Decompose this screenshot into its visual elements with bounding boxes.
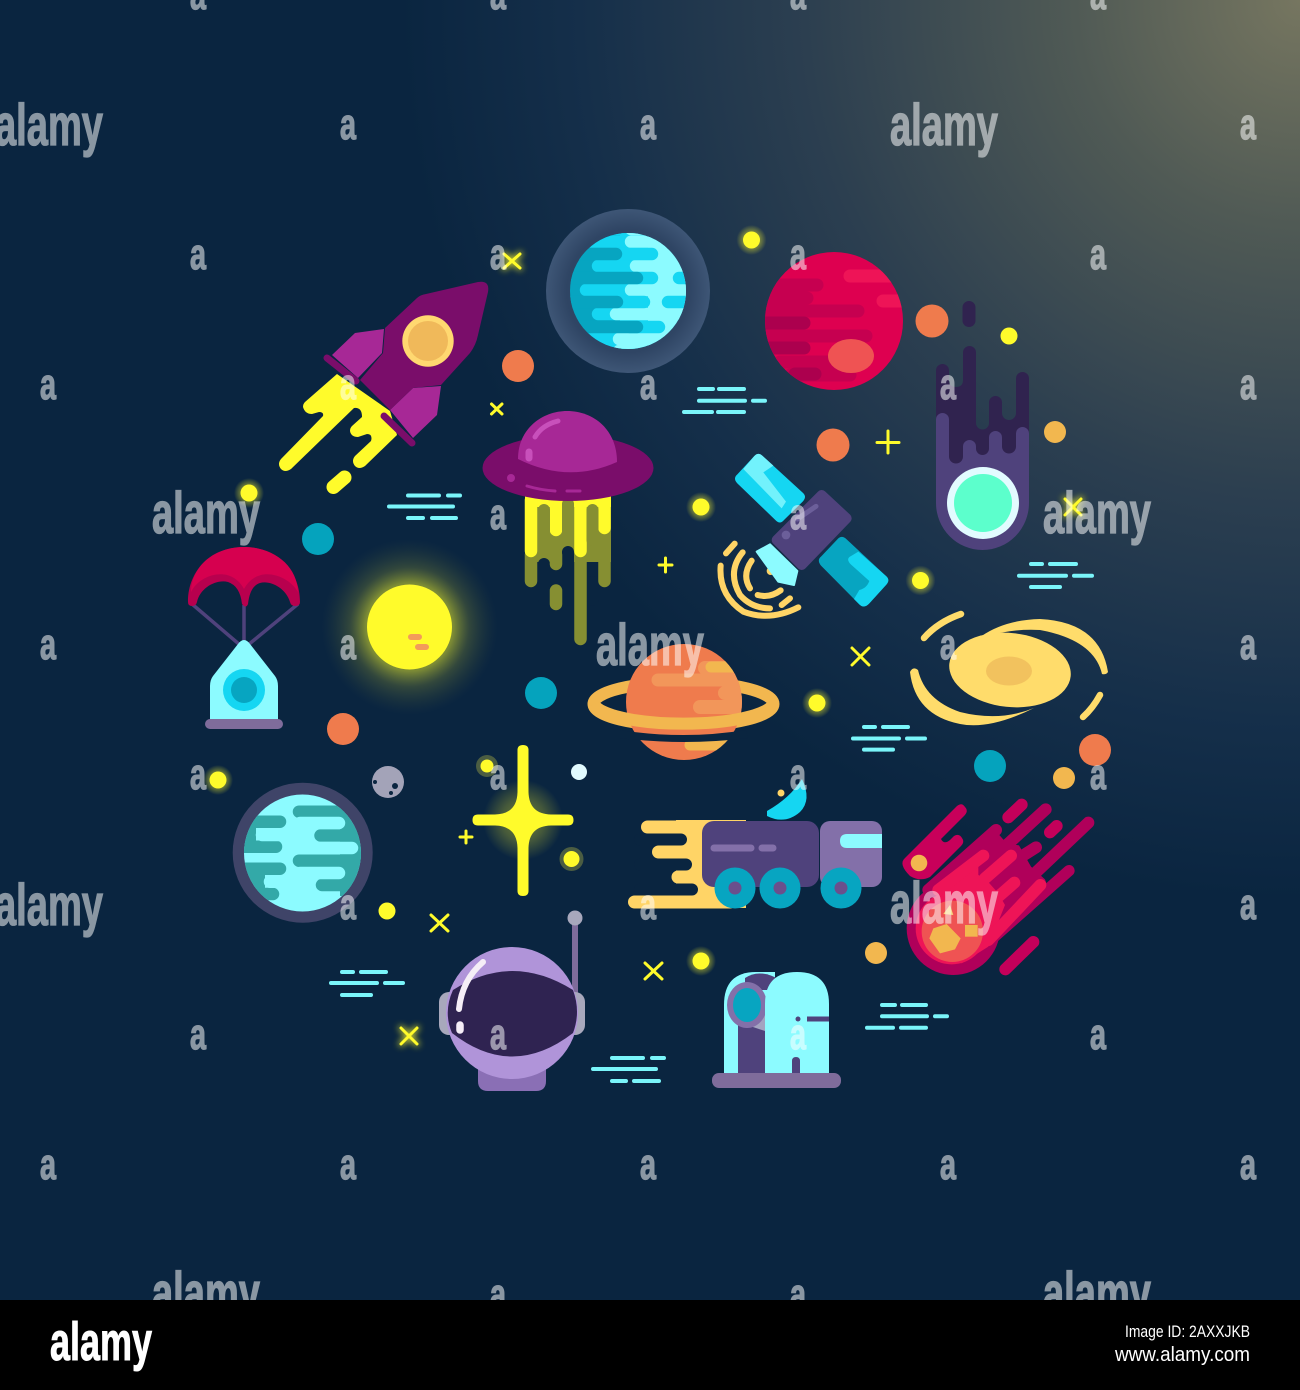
icon: parachute capsule — [188, 547, 300, 729]
watermark pattern: a — [340, 620, 356, 669]
rocket fins — [332, 329, 441, 438]
comet body — [936, 413, 1029, 550]
watermark pattern: a — [40, 1140, 56, 1189]
capsule base — [205, 719, 283, 729]
parachute canopy — [188, 547, 300, 606]
watermark pattern: a — [1090, 1010, 1106, 1059]
helmet visor — [448, 971, 577, 1056]
satellite dish module — [757, 544, 797, 585]
watermark pattern: alamy — [890, 871, 998, 936]
rover body — [702, 821, 819, 887]
watermark pattern: a — [1240, 620, 1256, 669]
icon: blue planet with halo — [546, 209, 710, 373]
watermark pattern: a — [40, 620, 56, 669]
icon: lunar rover — [634, 779, 882, 908]
icon: teal planet — [233, 783, 380, 923]
watermark pattern: alamy — [1043, 1261, 1151, 1326]
decorative dots: orange, teal and gold — [302, 304, 1111, 964]
rocket body — [360, 282, 488, 410]
saturn back ring — [594, 682, 774, 726]
saturn sphere — [626, 644, 742, 760]
watermark pattern: a — [640, 880, 656, 929]
watermark pattern: a — [640, 360, 656, 409]
icon: galaxy — [910, 614, 1108, 725]
observatory right dome — [765, 972, 829, 1073]
watermark pattern: alamy — [890, 93, 998, 158]
watermark pattern: a — [490, 490, 506, 539]
rocket window — [402, 315, 454, 367]
watermark pattern: a — [40, 360, 56, 409]
watermark pattern: a — [790, 490, 806, 539]
small comet — [902, 804, 967, 879]
footer bar — [0, 1300, 1300, 1390]
helmet dome — [446, 947, 578, 1079]
rover dish — [767, 779, 807, 820]
watermark pattern: a — [790, 750, 806, 799]
watermark pattern: a — [940, 360, 956, 409]
comet dark tail — [936, 308, 1029, 475]
helmet ear pieces — [439, 992, 585, 1035]
watermark pattern: alamy — [1043, 481, 1151, 546]
watermark pattern: a — [640, 100, 656, 149]
rocket flame — [279, 374, 397, 487]
meteor rock — [929, 924, 961, 953]
saturn gap and front ring — [620, 730, 748, 742]
satellite lower panel — [819, 537, 888, 606]
icon: rocket — [279, 282, 488, 487]
watermark pattern: a — [940, 620, 956, 669]
watermark pattern: a — [490, 1010, 506, 1059]
watermark pattern: alamy — [596, 613, 704, 678]
helmet antenna — [572, 922, 578, 995]
decorative speed lines — [331, 389, 1092, 1081]
satellite signal waves — [720, 544, 798, 616]
observatory telescope — [727, 982, 767, 1028]
watermark pattern: a — [340, 880, 356, 929]
icon: saturn — [594, 640, 774, 765]
icon: observatory — [712, 972, 841, 1088]
icon: meteor — [902, 804, 1088, 975]
satellite body — [777, 495, 847, 565]
icon: satellite — [720, 454, 888, 616]
decorative crosses and plus signs — [401, 254, 1081, 1044]
watermark pattern: a — [490, 1270, 506, 1319]
icon: sun — [322, 539, 498, 715]
icon: moon — [372, 766, 404, 798]
watermark pattern: a — [790, 1270, 806, 1319]
meteor bright core — [916, 856, 1040, 964]
icon: astronaut helmet — [439, 910, 585, 1091]
watermark pattern: a — [790, 230, 806, 279]
helmet neck — [478, 1060, 546, 1091]
observatory base — [712, 1073, 841, 1088]
icon: ufo — [482, 411, 654, 639]
comet head — [947, 467, 1019, 539]
watermark pattern: a — [1090, 230, 1106, 279]
observatory left dome — [724, 972, 775, 1073]
parachute strings — [192, 604, 298, 645]
rover trail — [634, 820, 746, 908]
capsule — [210, 640, 278, 719]
watermark pattern: a — [340, 360, 356, 409]
ufo beam — [518, 495, 611, 639]
watermark pattern: alamy — [152, 481, 260, 546]
icon: four-point star — [472, 745, 574, 896]
footer site url: www.alamy.com — [1114, 1344, 1250, 1366]
watermark pattern: a — [490, 750, 506, 799]
watermark pattern: a — [940, 1140, 956, 1189]
icon: comet — [936, 308, 1029, 550]
footer image id: Image ID: 2AXXJKB — [1125, 1322, 1250, 1341]
meteor tail and head — [907, 805, 1088, 975]
decorative yellow glowing dots — [203, 225, 1018, 976]
ufo dome — [518, 411, 617, 472]
watermark pattern: a — [1240, 360, 1256, 409]
rover wheels — [714, 868, 862, 908]
watermark pattern: a — [190, 230, 206, 279]
meteor dark tail — [907, 805, 1088, 975]
watermark pattern: a — [1090, 750, 1106, 799]
watermark pattern: a — [190, 1010, 206, 1059]
satellite upper panel — [735, 454, 805, 522]
watermark pattern: alamy — [152, 1261, 260, 1326]
watermark pattern: a — [1240, 880, 1256, 929]
watermark pattern: a — [190, 750, 206, 799]
watermark pattern: a — [640, 1140, 656, 1189]
ufo saucer — [482, 435, 654, 501]
watermark pattern: a — [1240, 1140, 1256, 1189]
footer logo: alamy — [50, 1312, 152, 1372]
rover cab — [820, 821, 882, 887]
watermark pattern: a — [340, 1140, 356, 1189]
watermark pattern: a — [1240, 100, 1256, 149]
watermark pattern: a — [790, 1010, 806, 1059]
icon: red planet — [765, 252, 903, 390]
watermark pattern: a — [490, 230, 506, 279]
watermark pattern: a — [340, 100, 356, 149]
